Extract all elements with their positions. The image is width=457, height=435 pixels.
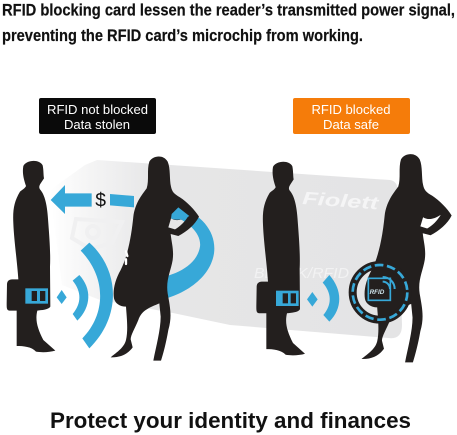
woman silhouette	[362, 154, 452, 362]
label: RFID not blocked: RFID not blocked	[47, 102, 148, 117]
woman silhouette	[111, 157, 199, 361]
phone highlight	[126, 251, 127, 264]
scene: blocked	[256, 154, 452, 362]
man silhouette with briefcase	[256, 162, 305, 355]
card shield icon	[72, 219, 122, 249]
label: RFID blocked	[293, 98, 410, 134]
scene: not blocked	[7, 157, 214, 361]
blocked RFID ring: RFID	[370, 289, 385, 296]
tagline: Protect your identity and finances	[50, 408, 411, 433]
RFID tag icon	[368, 278, 390, 300]
label: RFID not blocked: Data stolen	[64, 117, 130, 132]
signal waves	[57, 243, 113, 348]
blocked RFID ring	[353, 265, 407, 320]
card logo text: Fiolett	[302, 188, 380, 213]
title	[2, 0, 455, 45]
background card	[50, 160, 402, 338]
arrow with dollar	[51, 185, 134, 214]
label: RFID blocked: RFID blocked	[312, 102, 390, 117]
blue arc over arm gap	[171, 207, 189, 220]
blue arc from woman	[148, 207, 214, 302]
arrow with dollar: $	[95, 191, 106, 212]
label: RFID not blocked	[39, 98, 156, 134]
card faint print: BLOCK/RFID	[254, 265, 349, 282]
man silhouette with briefcase	[7, 161, 55, 352]
label: RFID blocked: Data safe	[323, 117, 379, 132]
card chip on briefcase	[25, 288, 48, 304]
title: preventing the RFID card’s microchip from working.	[2, 26, 363, 45]
card chip on briefcase	[276, 291, 299, 306]
signal waves	[307, 275, 339, 322]
